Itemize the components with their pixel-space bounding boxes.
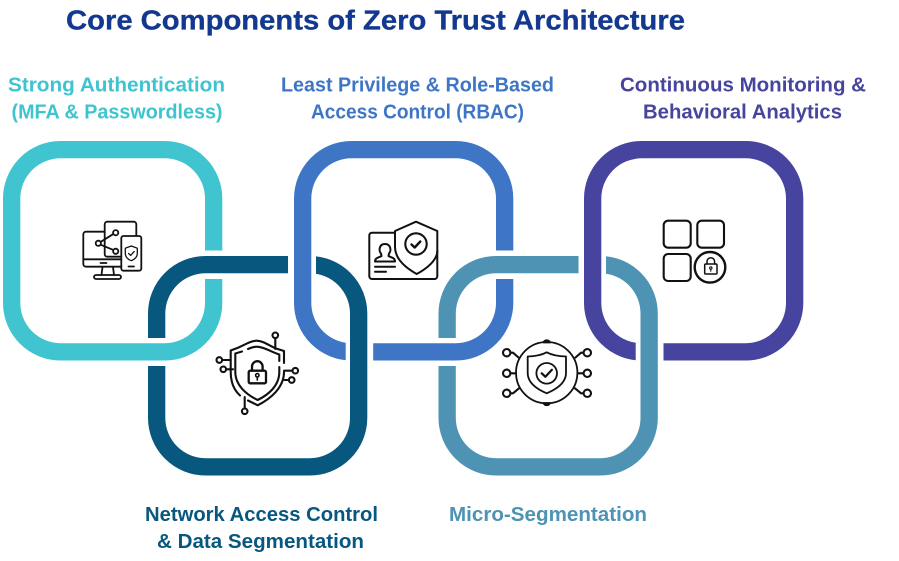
ring: network access control [157,265,359,467]
heading: network access control [145,504,378,553]
ring: continuous monitoring [593,150,795,352]
ring: least privilege [303,150,505,352]
heading: strong authentication: Strong Authentication [8,74,225,96]
icon: shield with lock and circuit nodes [216,332,298,414]
ring: strong authentication [12,150,214,352]
icon: id card with shield [369,222,437,279]
icon: devices with share and shield [83,222,141,279]
ring: micro-segmentation [447,265,649,467]
heading: micro-segmentation: Micro-Segmentation [449,504,647,526]
heading: continuous monitoring [620,74,866,123]
heading: strong authentication: (MFA & Passwordless) [12,101,222,123]
heading: network access control: & Data Segmentation [157,531,364,553]
title: Core Components of Zero Trust Architecture [66,4,685,36]
heading: continuous monitoring: Continuous Monitoring & [620,74,866,96]
icon: shield in circle with circuit nodes [503,340,591,405]
icon: app grid with lock [664,221,725,283]
heading: least privilege: Least Privilege & Role-Based [281,74,554,96]
heading: least privilege [281,74,554,123]
heading: continuous monitoring: Behavioral Analytics [643,101,842,123]
heading: strong authentication [8,74,225,123]
heading: network access control: Network Access Control [145,504,378,526]
heading: least privilege: Access Control (RBAC) [311,101,524,123]
